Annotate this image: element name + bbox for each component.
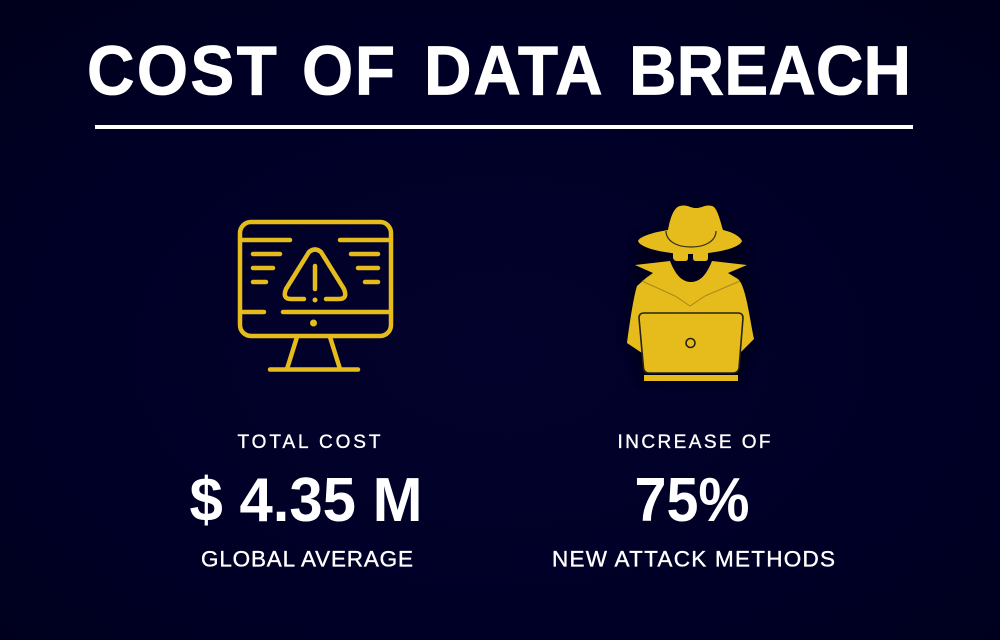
stat: total cost xyxy=(190,432,422,572)
laptop xyxy=(639,313,743,373)
label: total cost: TOTAL COST xyxy=(238,432,381,453)
icon: computer monitor with warning triangle xyxy=(240,222,391,370)
dark halo xyxy=(627,206,754,381)
label: increase of: INCREASE OF xyxy=(618,432,770,453)
collar fold xyxy=(642,281,740,306)
caption: new attack methods: NEW ATTACK METHODS xyxy=(552,546,835,572)
laptop base xyxy=(644,375,738,381)
value: 75%: 75% xyxy=(634,466,750,535)
icon: hacker with hat and laptop xyxy=(627,205,754,381)
glasses xyxy=(673,252,708,261)
value: 4.35 M: $ 4.35 M xyxy=(190,466,422,535)
coat xyxy=(627,261,754,362)
title: OF xyxy=(302,33,395,110)
stat: increase xyxy=(552,432,835,572)
title: DATA xyxy=(424,33,603,110)
title: BREACH xyxy=(629,33,911,110)
title: COST xyxy=(87,33,277,110)
title underline xyxy=(95,125,913,129)
title xyxy=(87,33,911,110)
hat xyxy=(638,205,742,254)
caption: global average: GLOBAL AVERAGE xyxy=(201,546,413,572)
